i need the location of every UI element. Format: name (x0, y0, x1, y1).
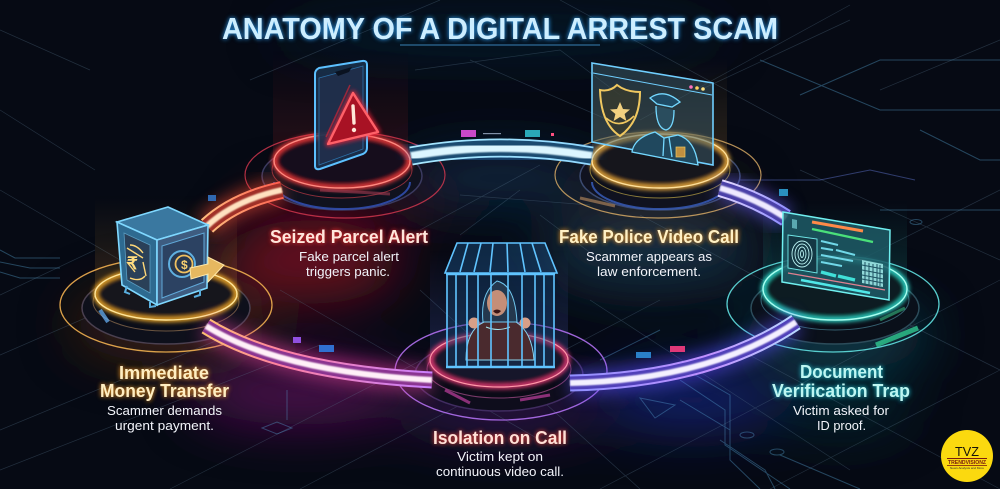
icon: phone with warning (315, 61, 378, 169)
fingerprint (788, 235, 817, 273)
label: fake police video call: law enforcement. (597, 265, 701, 279)
label: isolation on call: Isolation on Call (433, 428, 567, 448)
cage (445, 243, 557, 367)
transfer arrow (190, 257, 224, 282)
label: isolation on call: continuous video call. (436, 465, 564, 479)
label: immediate money transfer: Immediate (119, 363, 209, 383)
label: document verification trap: Document (800, 362, 883, 382)
logo: TVZ Trendvisionz badge: News Analysis and More (950, 466, 984, 470)
label: immediate money transfer: Money Transfer (100, 381, 229, 401)
label: document verification trap (772, 362, 910, 433)
label: document verification trap: Victim asked for (793, 404, 889, 418)
label: seized parcel alert: Seized Parcel Alert (270, 227, 428, 247)
label: document verification trap: ID proof. (817, 419, 866, 433)
connector: police to document (720, 188, 786, 218)
title: ANATOMY OF A DIGITAL ARREST SCAM (222, 11, 778, 46)
icon: ID document card (782, 212, 890, 300)
victim (466, 281, 534, 360)
title rule (280, 44, 720, 46)
safe dial: $ (181, 258, 188, 272)
label: document verification trap: Verification Trap (772, 381, 910, 401)
label: fake police video call (559, 227, 739, 279)
label: seized parcel alert: Seized Parcel Alert (270, 227, 428, 247)
label: isolation on call (433, 428, 567, 479)
icon: caged victim (445, 243, 557, 367)
label: document verification trap: Document (800, 362, 883, 382)
data chips (208, 130, 788, 358)
connector: isolation to money (206, 326, 432, 380)
label: immediate money transfer (100, 363, 229, 433)
label: fake police video call: Fake Police Video Call (559, 227, 739, 247)
label: immediate money transfer: Immediate (119, 363, 209, 383)
platform: money transfer (60, 258, 272, 352)
label: seized parcel alert (270, 227, 428, 279)
platform: isolation (395, 322, 607, 420)
platform: parcel alert (245, 132, 445, 218)
label: document verification trap: Verification Trap (772, 381, 910, 401)
logo: TVZ Trendvisionz badge (941, 430, 993, 482)
title: ANATOMY OF A DIGITAL ARREST SCAM (222, 11, 778, 46)
police officer (632, 94, 698, 165)
label: fake police video call: Fake Police Video Call (559, 227, 739, 247)
label: isolation on call: Victim kept on (457, 450, 543, 464)
connector: alert to police (411, 148, 592, 156)
QR code (862, 260, 883, 287)
icon: police video call (592, 63, 713, 165)
label: immediate money transfer: urgent payment. (115, 419, 214, 433)
connector: document to isolation (570, 322, 796, 383)
label: seized parcel alert: Fake parcel alert (299, 250, 400, 264)
logo: TVZ Trendvisionz badge: TRENDVISIONZ (948, 460, 987, 466)
connector: money to alert (207, 190, 282, 226)
label: immediate money transfer: Scammer demands (107, 404, 222, 418)
label: isolation on call: Isolation on Call (433, 428, 567, 448)
platform: fake police call (555, 132, 761, 218)
logo: TVZ Trendvisionz badge: TVZ (955, 444, 979, 459)
rupee symbol: ₹ (127, 254, 138, 273)
light columns behind icons (95, 50, 907, 360)
icon: safe with transfer arrow (117, 207, 224, 307)
police badge (600, 85, 640, 136)
label: fake police video call: Scammer appears as (586, 250, 712, 264)
label: immediate money transfer: Money Transfer (100, 381, 229, 401)
label: seized parcel alert: triggers panic. (306, 265, 390, 279)
platform: document trap (727, 256, 939, 352)
warning triangle (328, 93, 378, 144)
